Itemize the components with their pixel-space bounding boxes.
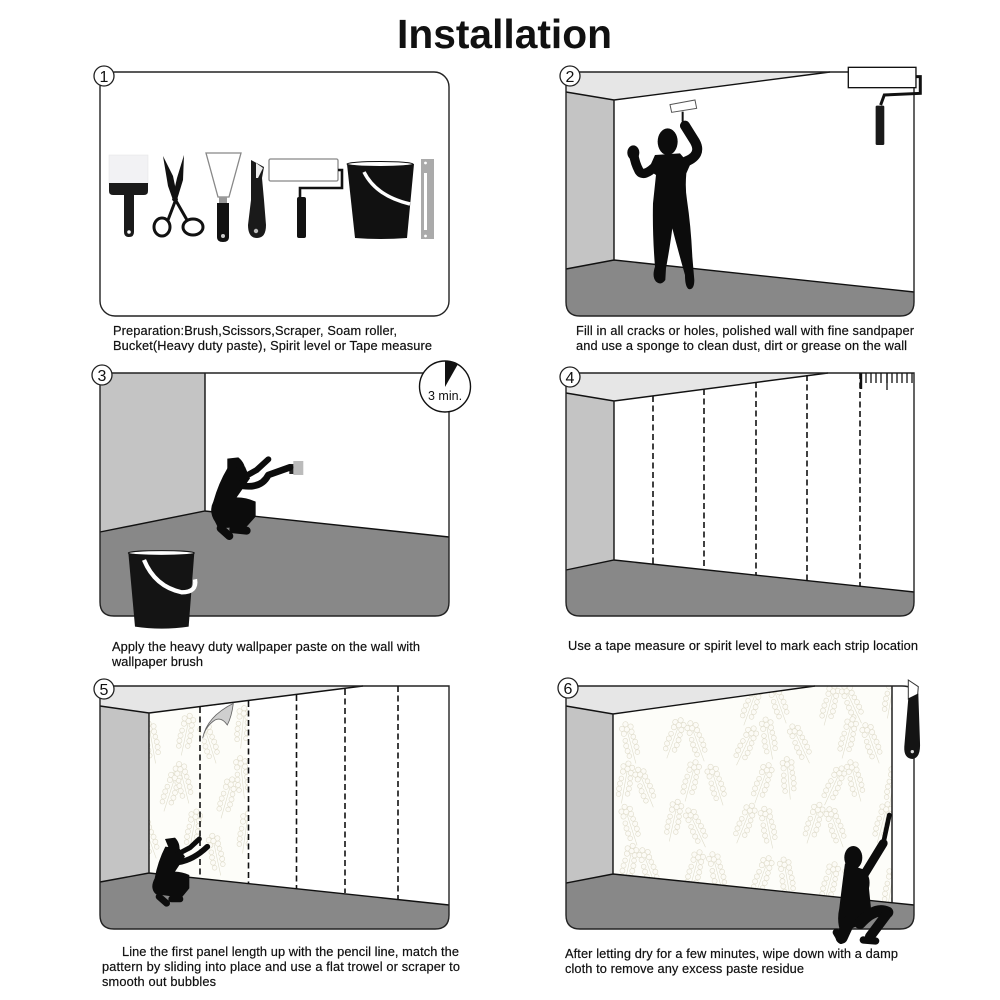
step number 5: 5	[100, 682, 109, 699]
wallpaper corner peel	[201, 703, 233, 743]
caption 6	[565, 946, 898, 976]
room 2	[566, 72, 914, 316]
step number 1: 1	[100, 69, 109, 86]
full wallpaper	[616, 686, 892, 902]
pencil lines	[653, 373, 860, 586]
clock: 3 min	[420, 361, 470, 412]
room 4	[566, 373, 914, 616]
icon: foam roller	[269, 159, 342, 238]
step number 2: 2	[566, 69, 575, 86]
person rolling wall	[627, 100, 697, 289]
caption 5: Line the first panel length up with the pencil line, match the	[122, 944, 459, 959]
caption 1: Preparation:Brush,Scissors,Scraper, Soam roller,	[113, 323, 397, 338]
icon: paint brush	[109, 155, 148, 237]
step number 6	[558, 678, 578, 698]
icon: spirit level	[421, 159, 434, 239]
caption 3	[111, 639, 420, 669]
step number 4: 4	[566, 370, 575, 387]
clock: 3 min: 3 min.	[428, 389, 462, 403]
icon: scissors	[154, 155, 203, 236]
caption 3: wallpaper brush	[111, 654, 203, 669]
caption 2: Fill in all cracks or holes, polished wall with fine sandpaper	[576, 323, 915, 338]
room 6	[566, 675, 914, 929]
step number 6: 6	[564, 681, 573, 698]
icon: scraper in use	[904, 680, 920, 759]
caption 2	[576, 323, 915, 353]
panel: step 4 mark strips	[560, 367, 918, 653]
person smoothing panel	[152, 838, 207, 903]
icon: bucket	[347, 162, 414, 239]
panel: step 3 apply paste	[92, 361, 470, 669]
caption 6: cloth to remove any excess paste residue	[565, 961, 804, 976]
caption 3: Apply the heavy duty wallpaper paste on the wall with	[112, 639, 420, 654]
caption 6: After letting dry for a few minutes, wipe down with a damp	[565, 946, 898, 961]
caption 4: Use a tape measure or spirit level to mark each strip location	[568, 638, 918, 653]
panel: step 5 hang first panel	[94, 679, 460, 989]
icon: paste bucket	[128, 551, 195, 629]
caption 2: and use a sponge to clean dust, dirt or grease on the wall	[576, 338, 907, 353]
caption 5: smooth out bubbles	[102, 974, 216, 989]
person wiping wall	[836, 815, 889, 941]
panel: step 2 prepare wall	[560, 66, 920, 353]
pencil lines	[200, 686, 398, 899]
caption 1	[113, 323, 432, 353]
icon: large roller	[848, 67, 920, 145]
step number 5	[94, 679, 114, 699]
panel: step 1 preparation tools	[94, 66, 449, 353]
caption 5: pattern by sliding into place and use a flat trowel or scraper to	[102, 959, 460, 974]
step number 3: 3	[98, 368, 107, 385]
step number 4	[560, 367, 580, 387]
title: Installation	[397, 11, 612, 57]
step number 2	[560, 66, 580, 86]
icon: scraper	[206, 153, 241, 242]
person applying paste	[211, 457, 303, 536]
step number 1	[94, 66, 114, 86]
wallpaper strip	[150, 705, 248, 876]
room 3	[100, 373, 449, 616]
tape measure	[861, 373, 912, 390]
icon: putty knife	[248, 160, 266, 238]
panel: step 6 finish	[558, 675, 920, 976]
caption 5	[102, 944, 460, 989]
step number 3	[92, 365, 112, 385]
panel 1 frame	[100, 72, 449, 316]
caption 1: Bucket(Heavy duty paste), Spirit level or Tape measure	[113, 338, 432, 353]
room 5	[100, 686, 449, 929]
